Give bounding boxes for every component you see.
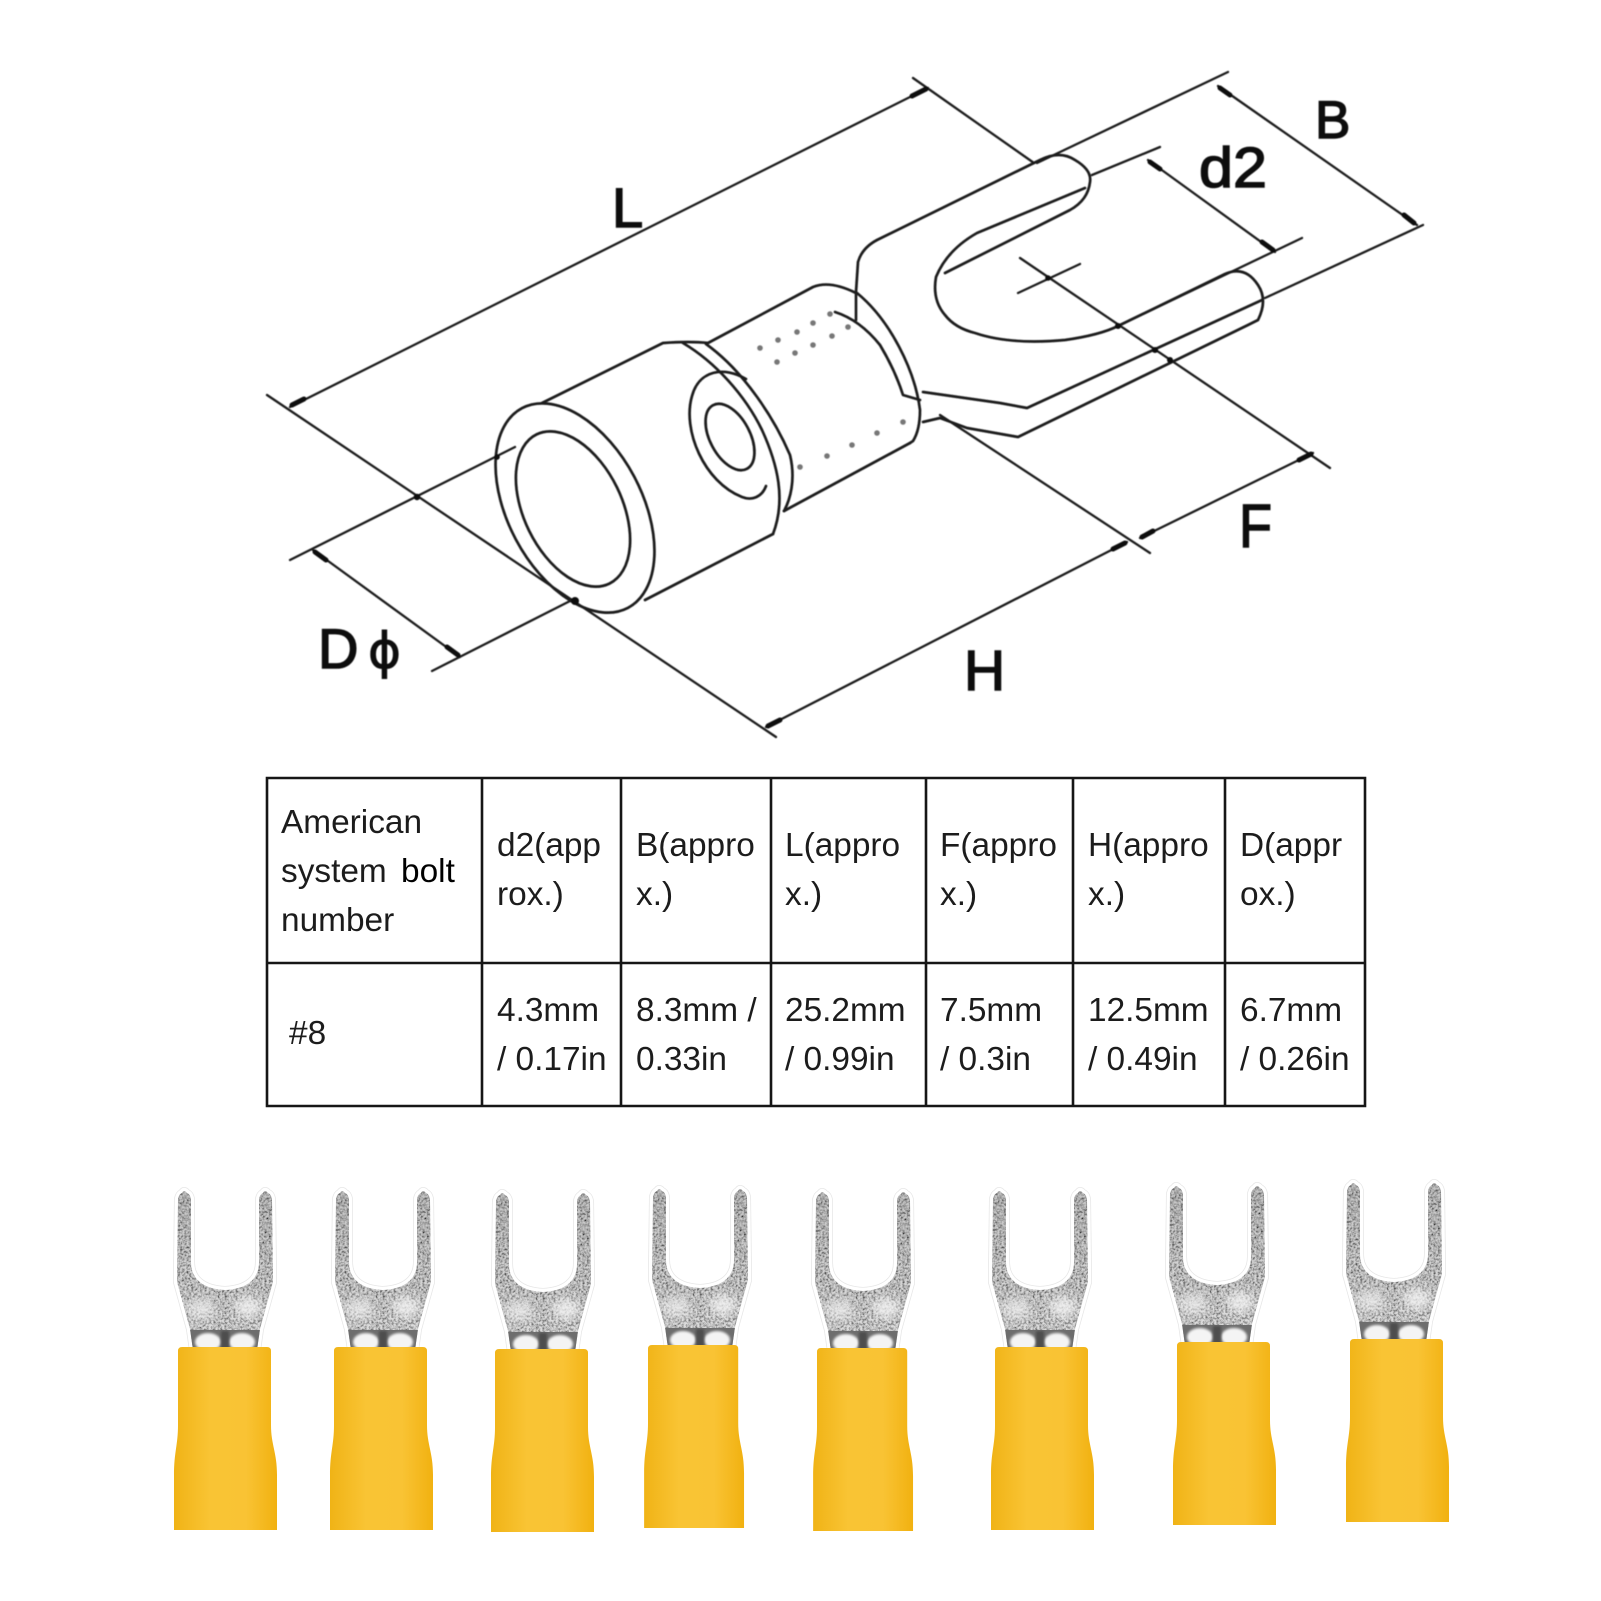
value: L: 25.2mm	[785, 992, 906, 1029]
dimension d2	[1092, 147, 1302, 326]
terminal 3	[491, 1189, 596, 1532]
header: bolt number: number	[281, 902, 394, 939]
value: F: 7.5mm	[940, 992, 1042, 1029]
terminal 2	[330, 1187, 436, 1530]
metal fork	[856, 155, 1263, 437]
value: F: / 0.3in	[940, 1041, 1031, 1078]
header: H: x.)	[1088, 876, 1125, 913]
value: L: / 0.99in	[785, 1041, 895, 1078]
label L: L	[612, 176, 643, 239]
value: #8: #8	[289, 1015, 326, 1052]
header: bolt number: American	[281, 804, 422, 841]
terminal 6	[989, 1187, 1094, 1530]
dimension F	[1018, 258, 1330, 538]
header: F: F(appro	[940, 827, 1057, 864]
dimension B	[1037, 72, 1423, 298]
value: d2: 4.3mm	[497, 992, 599, 1029]
terminal 8	[1343, 1179, 1449, 1522]
header: B: x.)	[636, 876, 673, 913]
label phi glyph: ϕ	[368, 622, 401, 680]
terminal 4	[644, 1185, 753, 1528]
row of yellow fork terminals	[174, 1179, 1449, 1532]
header: d2: d2(app	[497, 827, 601, 864]
header: F: x.)	[940, 876, 977, 913]
dimension D phi	[290, 447, 572, 671]
header: L: L(appro	[785, 827, 900, 864]
header: d2: rox.)	[497, 876, 564, 913]
header: L: x.)	[785, 876, 822, 913]
value: B: 0.33in	[636, 1041, 727, 1078]
terminal 7	[1166, 1182, 1276, 1525]
header: D: ox.)	[1240, 876, 1296, 913]
label D phi: D	[318, 617, 358, 680]
value: d2: / 0.17in	[497, 1041, 607, 1078]
header: B: B(appro	[636, 827, 755, 864]
value: H: 12.5mm	[1088, 992, 1209, 1029]
value: D: 6.7mm	[1240, 992, 1342, 1029]
label d2: d2	[1199, 136, 1267, 200]
value: D: / 0.26in	[1240, 1041, 1350, 1078]
header: D: D(appr	[1240, 827, 1342, 864]
label F: F	[1239, 492, 1272, 560]
crimp dots	[757, 311, 906, 470]
dimension L	[290, 78, 1034, 407]
cylindrical barrel	[463, 285, 920, 639]
diagram: fork terminal dimension drawing	[267, 72, 1423, 737]
terminal 1	[174, 1187, 278, 1530]
header: H: H(appro	[1088, 827, 1209, 864]
specification table	[267, 778, 1365, 1106]
label H: H	[964, 639, 1005, 703]
label B: B	[1315, 91, 1350, 150]
header: bolt number: system bolt	[281, 853, 455, 890]
terminal 5	[812, 1188, 916, 1531]
value: H: / 0.49in	[1088, 1041, 1198, 1078]
table grid	[267, 778, 1365, 1106]
dimension H	[267, 395, 1150, 737]
value: B: 8.3mm /	[636, 992, 757, 1029]
line junction dots	[414, 275, 1173, 605]
